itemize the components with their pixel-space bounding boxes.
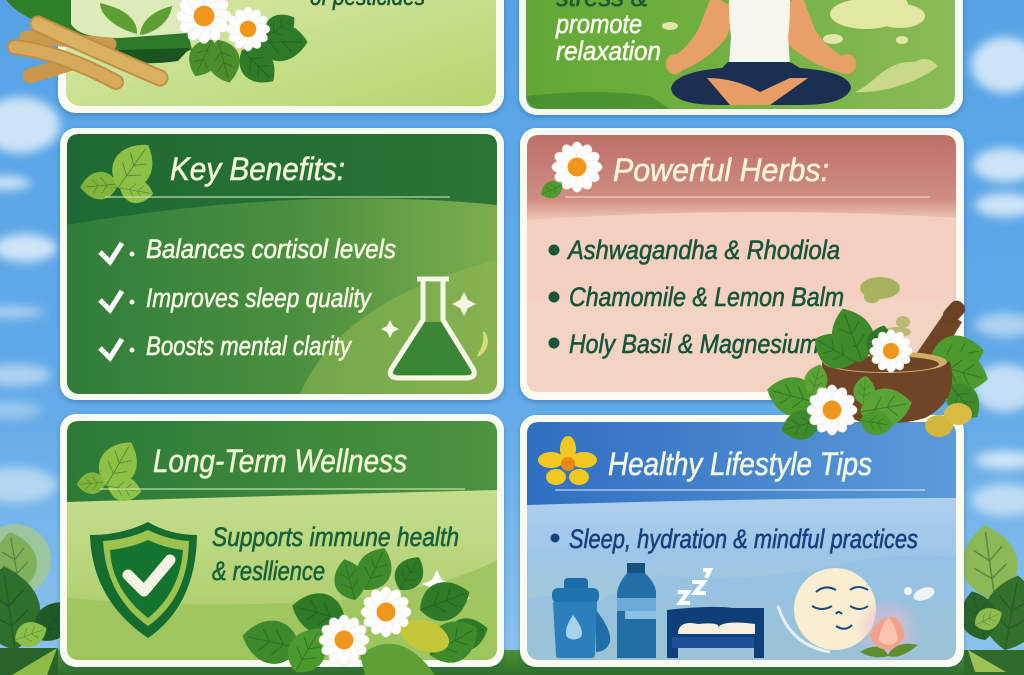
icon: shaker cup	[552, 578, 610, 658]
heading: Healthy Lifestyle Tips: Healthy Lifestyle Tips	[608, 446, 872, 482]
icon: shield with check	[90, 522, 197, 638]
icon: flask	[381, 279, 487, 378]
icon: flower and leaves	[176, 0, 308, 93]
list: herbs: Ashwagandha & Rhodiola	[566, 235, 840, 265]
figure: woman meditating	[666, 0, 856, 105]
heading: Powerful Herbs: Powerful Herbs:	[613, 152, 829, 188]
icon: yellow flower	[538, 436, 597, 485]
heading: Key Benefits: Key Benefits:	[170, 151, 345, 187]
panel: purity (top left, cut off)	[6, 0, 504, 113]
icon: green jar base	[71, 0, 192, 63]
decoration: pale clouds in meadow	[662, 0, 938, 92]
list: herbs: Chamomile & Lemon Balm	[569, 282, 844, 312]
text: immune support: Supports immune health	[212, 522, 459, 552]
icon: green leaves	[79, 134, 164, 206]
panel: relaxation (top right, cut off)	[519, 0, 963, 115]
text: relaxation caption	[555, 0, 661, 66]
heading: Long-Term Wellness: Long-Term Wellness	[153, 443, 407, 479]
icon: herb smudges	[860, 277, 911, 337]
panel: long-term wellness	[60, 414, 504, 675]
text: immune support: & resllience	[212, 556, 325, 586]
icon: sleeping moon face	[778, 568, 936, 652]
icon: water bottle	[617, 563, 656, 658]
background plants: right	[954, 521, 1024, 675]
text: immune support	[212, 522, 459, 586]
text: relaxation caption: relaxation	[556, 36, 661, 66]
list: benefits: Balances cortisol levels	[146, 234, 396, 264]
icon: lotus flower	[860, 604, 918, 657]
background plants: left	[0, 524, 80, 675]
icon: leaf behind jar	[6, 0, 74, 30]
icon: mortar and pestle with herbs	[762, 298, 993, 444]
text: tip: Sleep, hydration & mindful practices	[569, 524, 918, 554]
icon: leaves	[76, 433, 147, 504]
icon: bed with zzz	[667, 570, 764, 658]
icon: daisy with leaf	[537, 142, 602, 202]
panel: powerful herbs	[520, 128, 964, 400]
panel: key benefits	[60, 128, 504, 400]
icon: sparkles	[422, 570, 470, 610]
text: relaxation caption: promote	[555, 9, 642, 39]
list: benefits	[100, 234, 396, 361]
icon: daisies and foliage	[238, 541, 492, 675]
list: benefits: Boosts mental clarity	[146, 331, 352, 361]
background: grass strip	[0, 650, 1024, 675]
list: benefits: Improves sleep quality	[146, 283, 372, 313]
list: herbs	[549, 235, 844, 359]
icon: roots	[15, 24, 160, 82]
list: herbs: Holy Basil & Magnesium	[569, 329, 819, 359]
panel: healthy lifestyle tips	[520, 415, 964, 667]
